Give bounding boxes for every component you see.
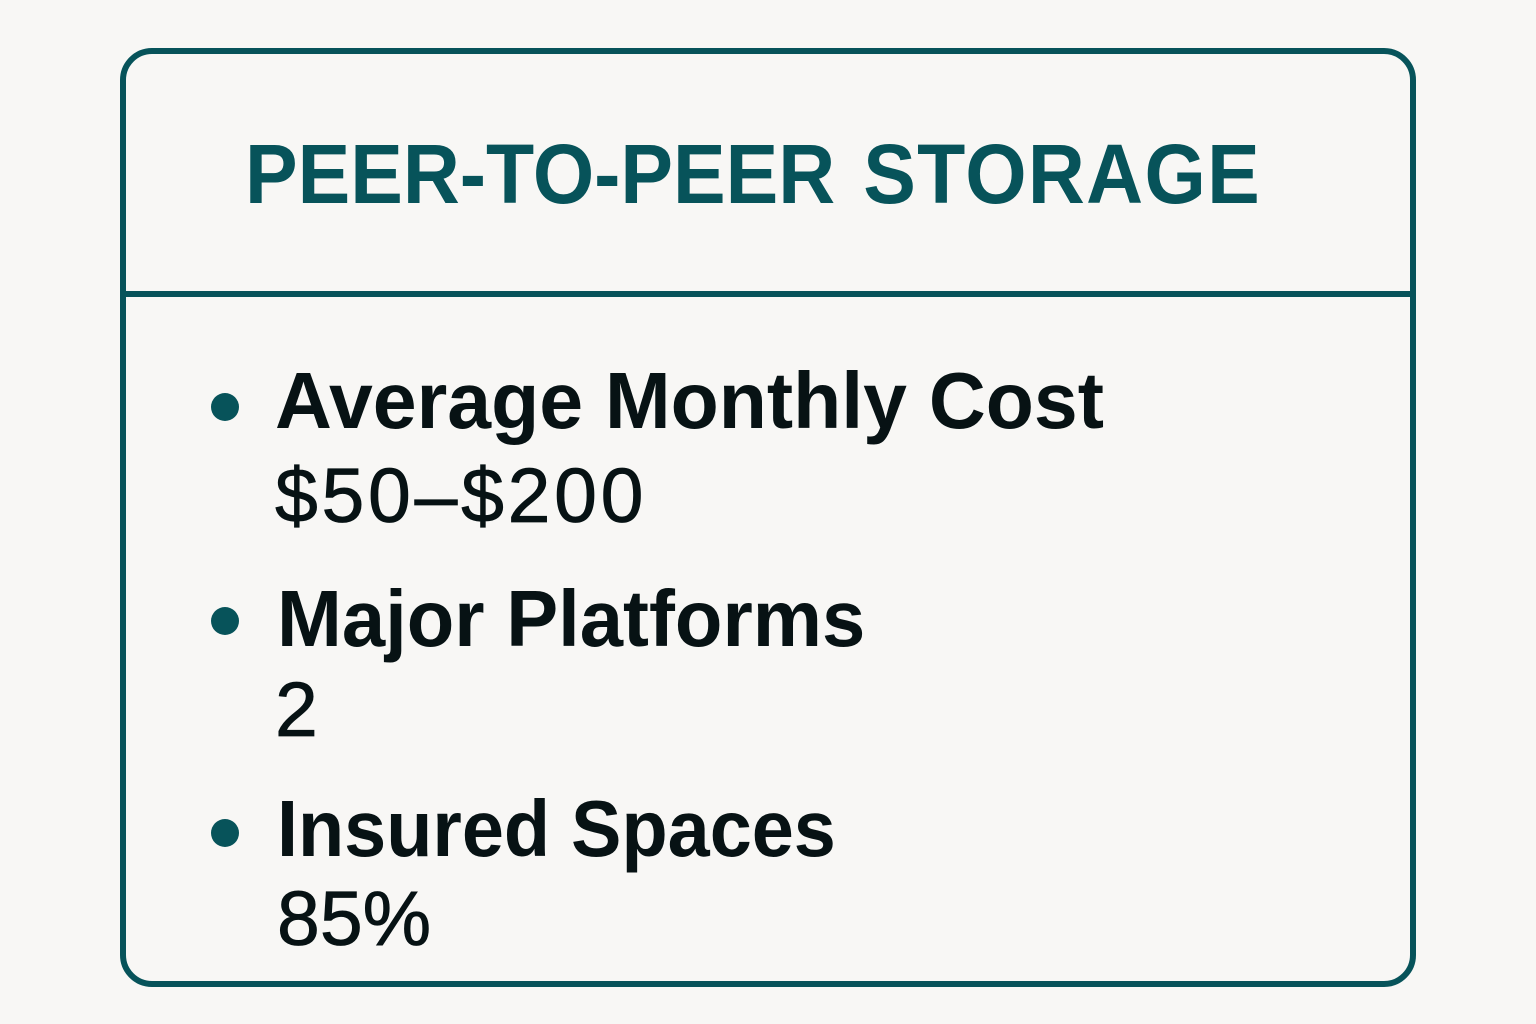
- header divider: [124, 291, 1412, 297]
- title: PEER-TO-PEER STORAGE: [245, 127, 1261, 221]
- value: average monthly cost: $50–$200: [275, 453, 647, 539]
- label: insured spaces: Insured Spaces: [277, 784, 836, 873]
- bullet: average monthly cost: [211, 393, 239, 421]
- value: major platforms: 2: [275, 667, 318, 753]
- label: average monthly cost: Average Monthly Cost: [275, 356, 1104, 445]
- bullet: major platforms: [211, 607, 239, 635]
- panel: peer-to-peer storage card: [120, 48, 1416, 987]
- bullet: insured spaces: [211, 819, 239, 847]
- label: major platforms: Major Platforms: [277, 574, 865, 663]
- value: insured spaces: 85%: [277, 876, 431, 962]
